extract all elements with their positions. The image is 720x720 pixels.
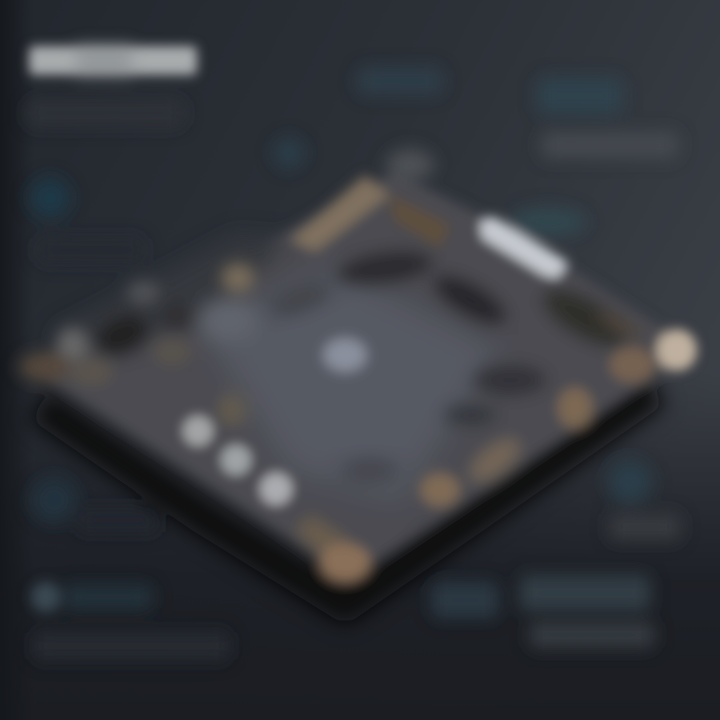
dark patches [90, 246, 634, 480]
icon: left dot [30, 178, 143, 262]
callout: top right [538, 78, 678, 158]
title bar [29, 46, 197, 75]
icon: small top centre dot [274, 138, 304, 168]
tan edge accents [19, 175, 655, 583]
callout: right [608, 460, 680, 540]
callout: bottom left lower [31, 582, 229, 660]
callout: bottom left upper [31, 477, 158, 532]
callout: top centre [358, 68, 442, 94]
corner highlight [657, 329, 697, 371]
card inner tint [200, 270, 500, 500]
glow behind white bar [510, 208, 586, 236]
white pill bar [480, 216, 568, 278]
subtitle placeholder [28, 100, 183, 126]
light grey highlights [57, 149, 434, 372]
upper left dim area [50, 235, 290, 355]
card shadow [40, 390, 655, 605]
card body [26, 172, 695, 580]
callout: bottom centre [432, 582, 498, 618]
three white dots [183, 416, 292, 505]
card: diamond tablet [19, 149, 697, 583]
callout: bottom right [520, 575, 654, 648]
